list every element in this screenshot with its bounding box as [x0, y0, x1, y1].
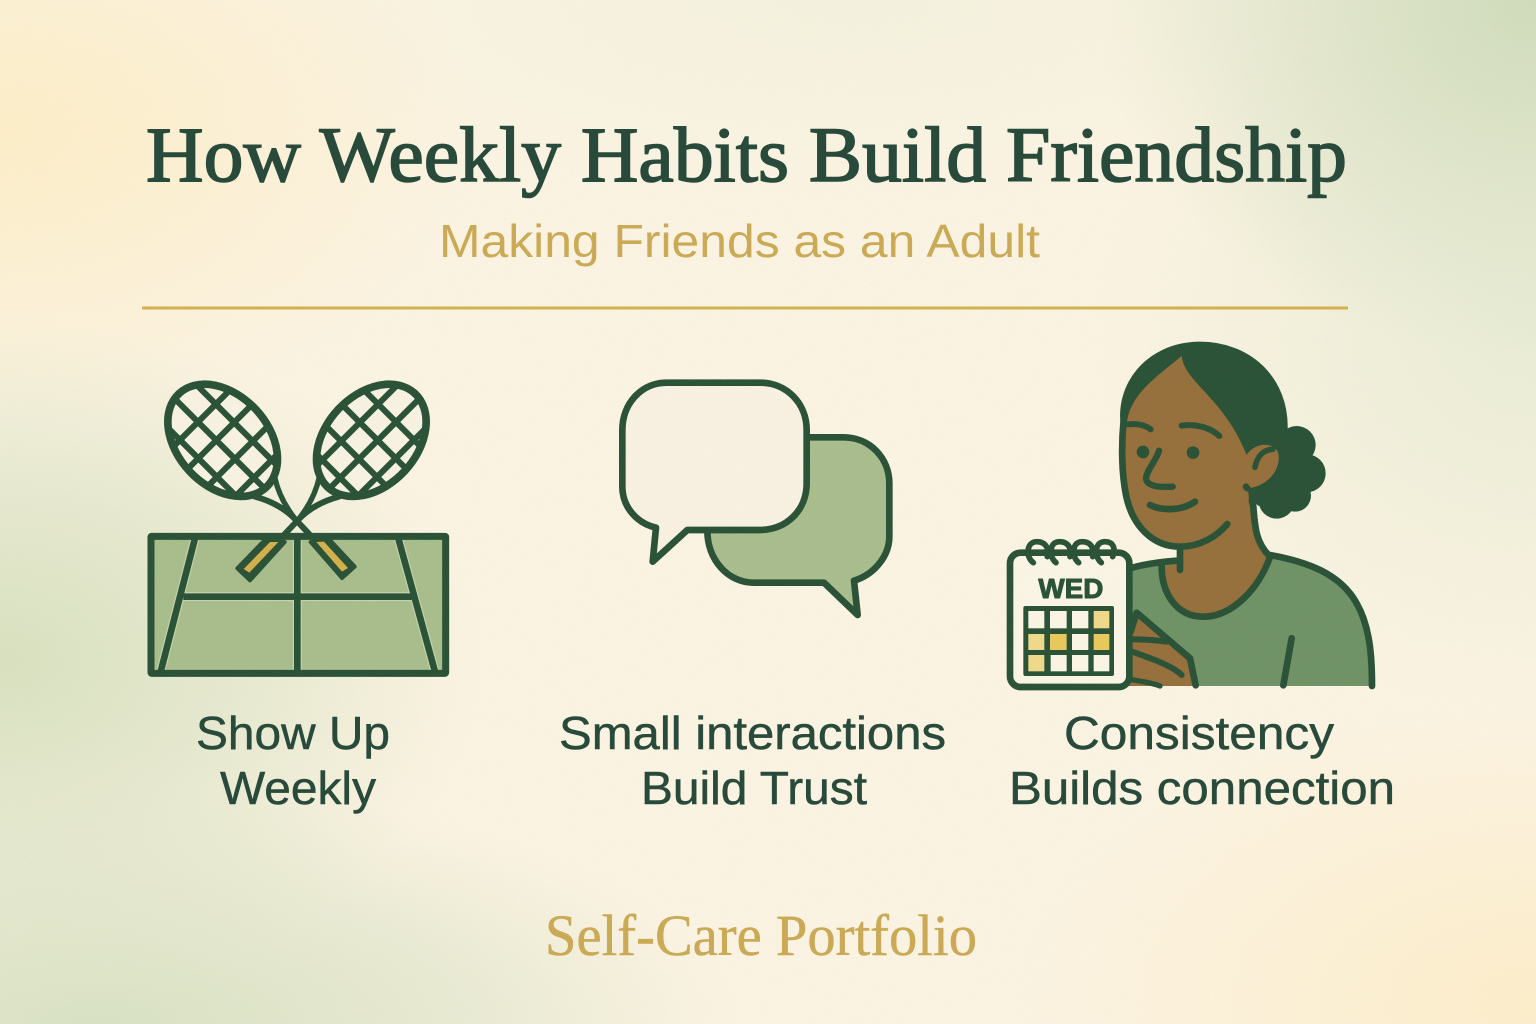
- label: consistency builds connection: [1009, 707, 1395, 814]
- subtitle: Making Friends as an Adult: [439, 215, 1040, 267]
- front bubble: [622, 383, 807, 562]
- label: small interactions build trust: [559, 707, 946, 814]
- hand: [1117, 613, 1196, 686]
- label: small interactions build trust: Small interactions: [559, 707, 946, 759]
- back bubble: [707, 437, 889, 615]
- calendar grid: [1023, 606, 1114, 676]
- calendar rings: [1028, 542, 1114, 563]
- label: consistency builds connection: Consistency: [1064, 707, 1334, 759]
- left racket: [164, 380, 312, 533]
- face outline: [1122, 420, 1227, 547]
- icon: woman holding calendar: [1010, 343, 1372, 687]
- calendar day label: WED: [1038, 573, 1103, 604]
- footer brand: Self-Care Portfolio: [545, 903, 977, 968]
- label: consistency builds connection: Builds connection: [1009, 762, 1395, 814]
- face: [1123, 356, 1279, 547]
- hair bun: [1243, 426, 1326, 519]
- label: show up weekly: Weekly: [220, 762, 376, 814]
- label: small interactions build trust: Build Trust: [641, 762, 867, 814]
- neck: [1162, 487, 1270, 617]
- calendar: [1010, 542, 1129, 687]
- title: How Weekly Habits Build Friendship: [146, 111, 1347, 198]
- label: show up weekly: Show Up: [196, 707, 390, 759]
- facial features: [1128, 424, 1273, 509]
- icon: tennis rackets on court: [148, 380, 450, 677]
- right racket: [282, 380, 430, 533]
- shirt: [1120, 555, 1372, 686]
- icon: speech bubbles: [622, 383, 889, 615]
- racket handles: [237, 537, 355, 580]
- label: show up weekly: [196, 707, 390, 814]
- court: [151, 536, 446, 673]
- hair: [1121, 343, 1287, 490]
